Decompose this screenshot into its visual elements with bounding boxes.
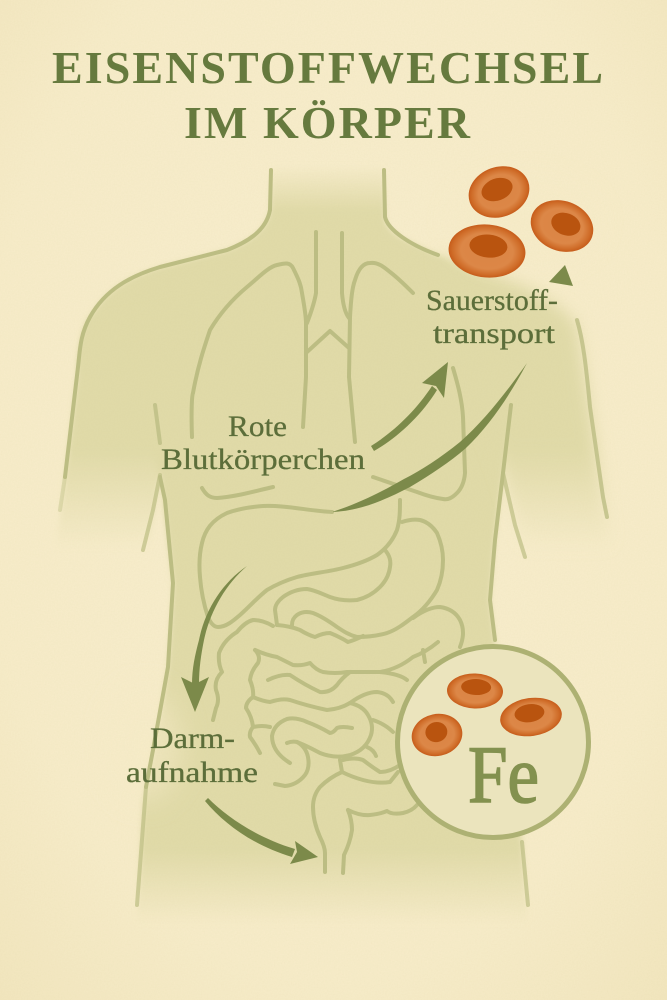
label: intestinal uptake	[126, 722, 258, 789]
magnified circle with iron	[398, 646, 588, 838]
label: oxygen transport: Sauerstoff-	[426, 284, 558, 317]
liver and stomach	[199, 500, 443, 637]
label: intestinal uptake: aufnahme	[126, 756, 258, 789]
small triangle arrowhead near cells	[549, 265, 573, 286]
red cell 3	[446, 221, 528, 281]
title: EISENSTOFFWECHSEL	[52, 42, 603, 93]
lungs and trachea	[192, 232, 465, 499]
body silhouette	[56, 165, 612, 925]
title: IM KÖRPER	[184, 97, 471, 148]
label: oxygen transport	[426, 284, 558, 350]
small intestine	[253, 672, 407, 786]
red cell 1	[461, 158, 537, 226]
arrow: iron uptake to red blood cells	[332, 363, 527, 512]
label: red blood cells	[161, 410, 365, 476]
arrow: to oxygen transport	[371, 362, 448, 451]
arrow: down to intestinal uptake	[181, 566, 247, 712]
red cell 2	[523, 192, 601, 260]
colon	[213, 607, 463, 753]
pale glow behind cells and labels	[110, 182, 595, 800]
label: intestinal uptake: Darm-	[150, 722, 235, 755]
iron symbol: Fe	[468, 729, 539, 820]
label: red blood cells: Rote	[228, 410, 287, 443]
title	[52, 42, 603, 148]
label: oxygen transport: transport	[433, 317, 556, 350]
label: red blood cells: Blutkörperchen	[161, 443, 365, 476]
sigmoid and rectum	[313, 720, 417, 873]
arrow: to rectum	[205, 798, 318, 864]
body outline	[60, 170, 607, 905]
red cell in circle 2	[498, 694, 564, 740]
red cell in circle 1	[446, 673, 504, 709]
digestive organs	[199, 500, 463, 873]
red cell in circle 3	[408, 709, 466, 761]
red blood cells top	[446, 158, 601, 281]
